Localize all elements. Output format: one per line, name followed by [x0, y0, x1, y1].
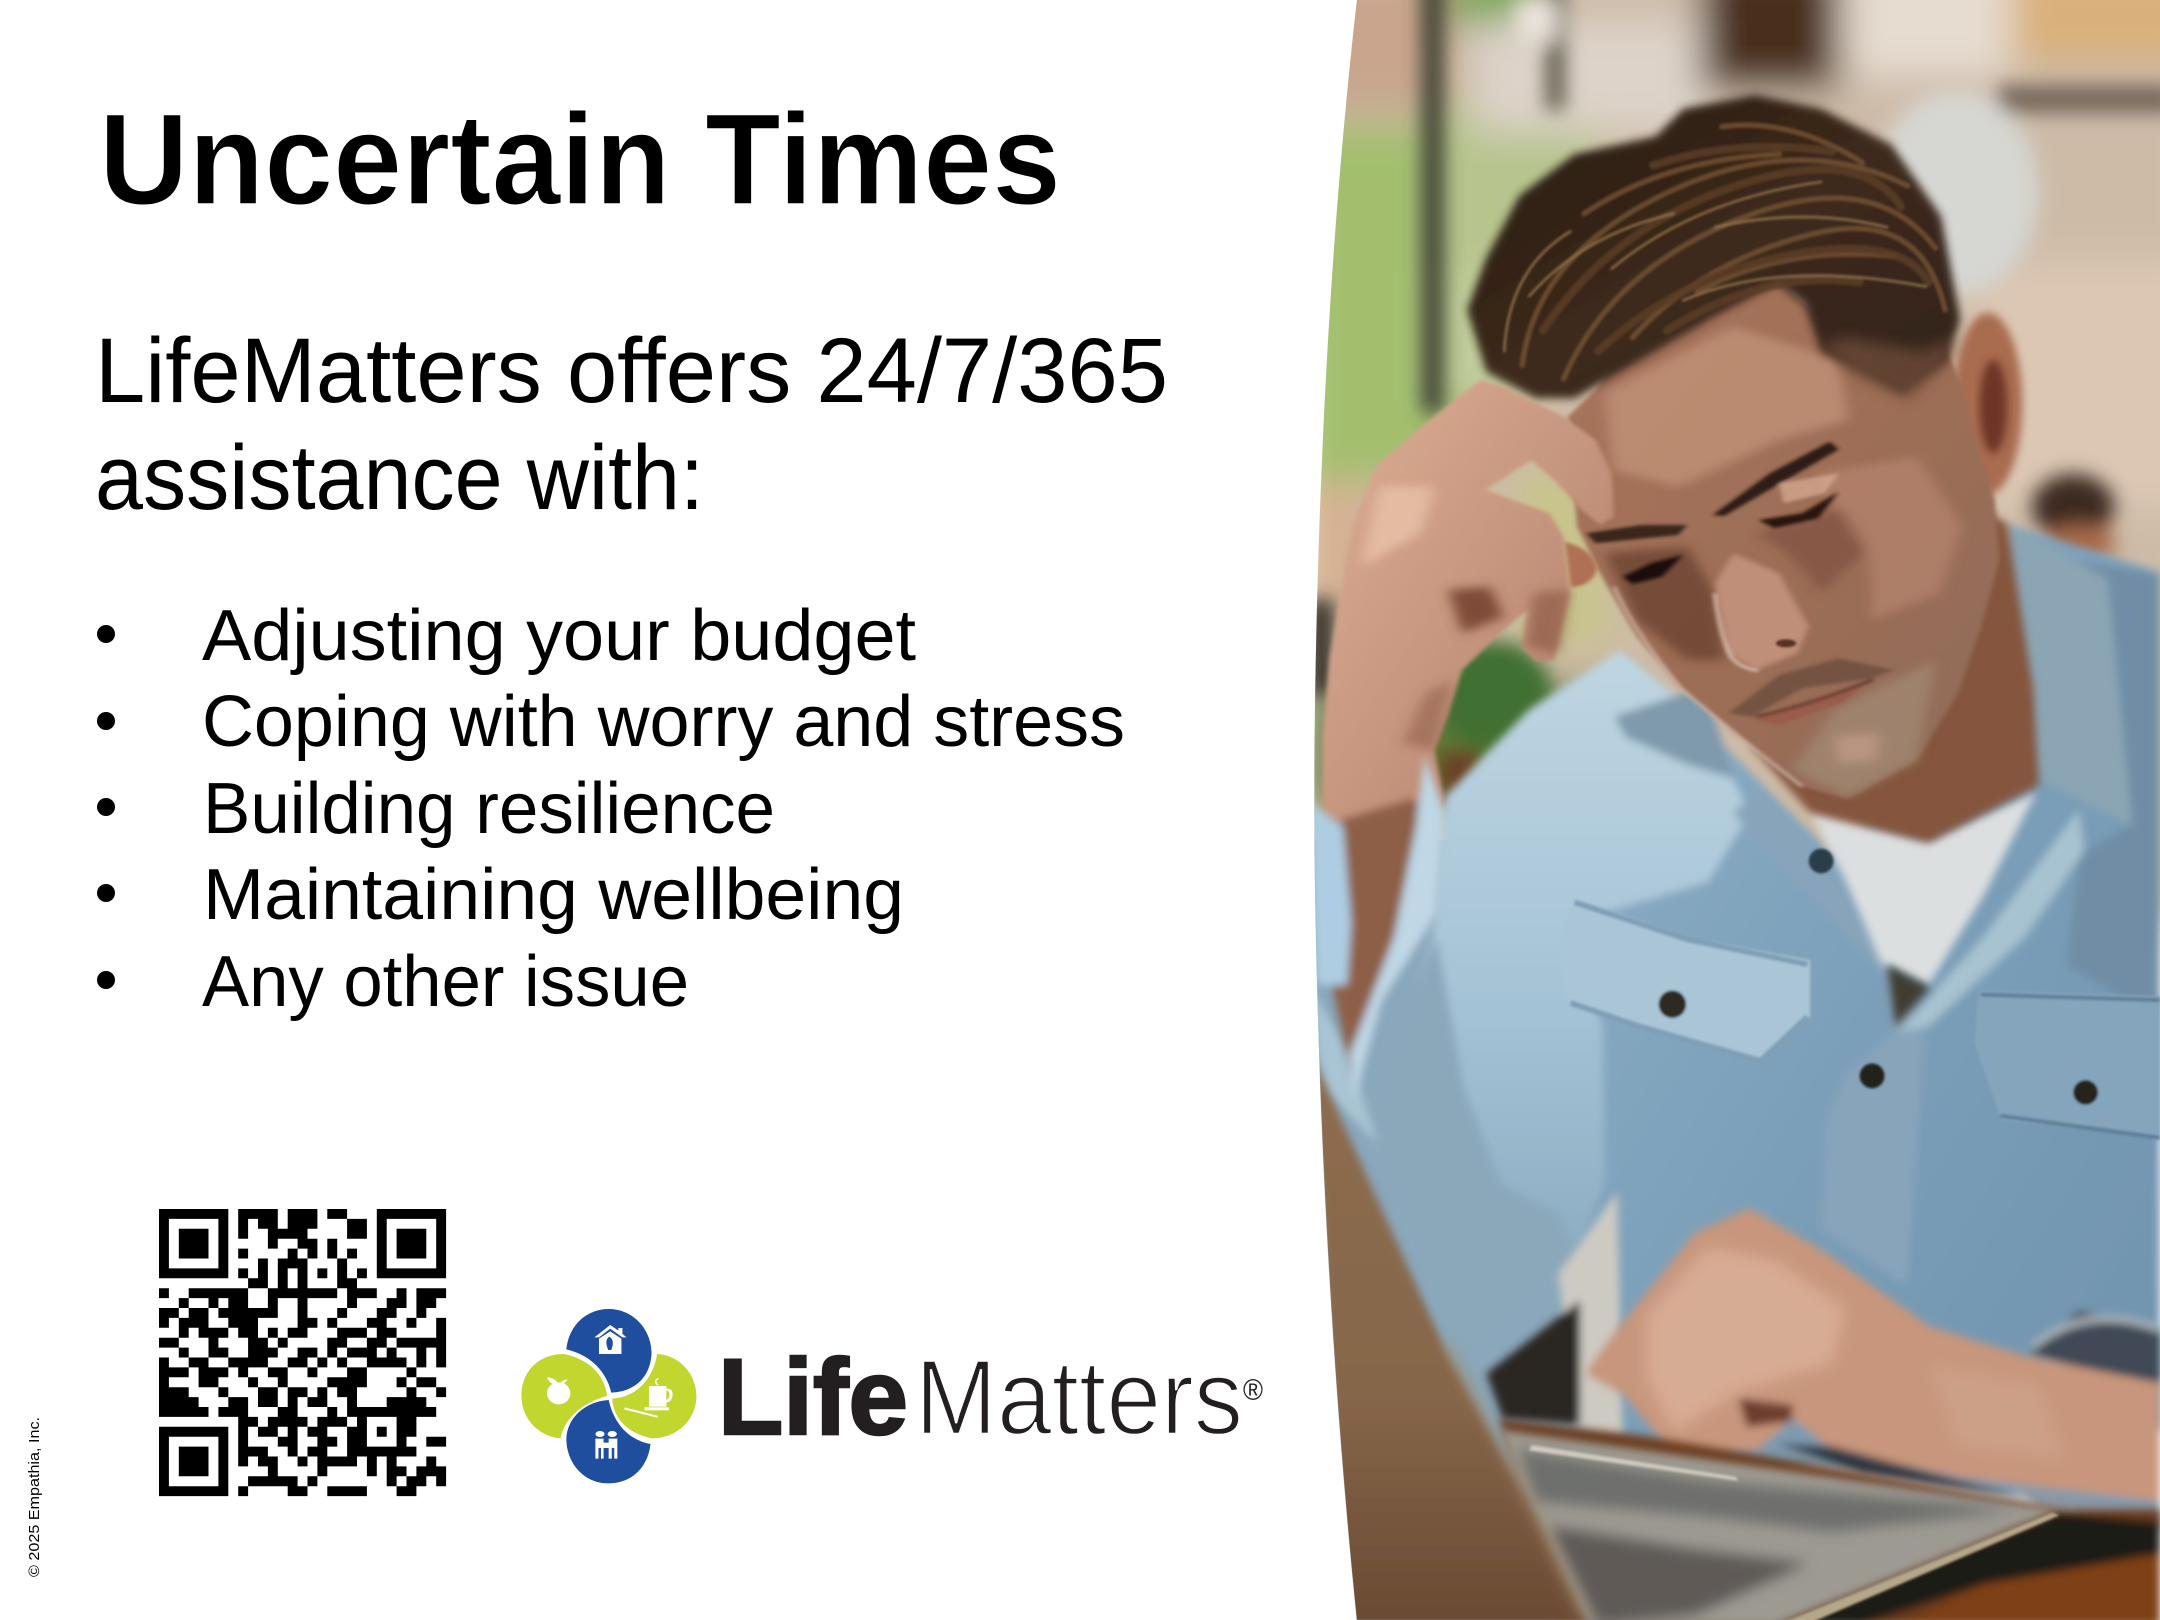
bullet list: Building resilience	[203, 769, 775, 849]
hair	[1467, 95, 1960, 399]
face shape	[1568, 267, 1999, 798]
photo: worried man at laptop	[1295, 0, 2160, 1620]
brows, eyes, mouth	[1586, 442, 1894, 725]
bullet list: Maintaining wellbeing	[203, 855, 904, 935]
QR code	[159, 1209, 446, 1496]
bullet list: Coping with worry and stress	[202, 682, 1125, 762]
shirt pockets and buttons	[1558, 849, 2160, 1138]
title: Uncertain Times	[99, 86, 1061, 232]
jaw highlight	[1614, 587, 1802, 787]
logo wordmark: Life	[718, 1336, 908, 1457]
hand shading	[1361, 487, 1570, 750]
shirt body	[1309, 523, 2160, 1474]
intro text	[95, 320, 1168, 529]
raised hand drawn in head-crop coordinates	[1322, 380, 1614, 840]
blurred cafe background	[1295, 0, 2160, 923]
background behind arm	[1486, 1192, 1623, 1440]
forearm and cuff	[1309, 755, 1445, 1099]
table	[1499, 1419, 2160, 1620]
face shading	[1605, 327, 1963, 797]
logo wordmark	[718, 1336, 1263, 1457]
left sleeve	[1428, 648, 1746, 1242]
collar flap	[1898, 810, 2084, 1032]
LifeMatters logo	[521, 1309, 1263, 1483]
ear	[1953, 313, 2022, 495]
intro text: assistance with:	[95, 427, 704, 529]
bullet list	[97, 596, 1125, 1022]
white t-shirt	[1810, 792, 2036, 985]
placket	[1733, 785, 1924, 1285]
neck	[1749, 510, 2039, 843]
bullet list: Adjusting your budget	[202, 596, 916, 676]
lower hand	[1586, 1208, 2160, 1529]
nose	[1715, 553, 1809, 670]
logo mark: four petals	[521, 1309, 696, 1483]
copyright: © 2025 Empathia, Inc.	[26, 1417, 43, 1577]
small finger behind brow	[1564, 542, 1597, 587]
right shoulder	[2067, 562, 2160, 996]
lower backdrop behind sleeve and arm	[1314, 840, 1584, 1620]
laptop base	[1502, 1430, 2059, 1620]
laptop lid	[1311, 1054, 1588, 1620]
bullet list: Any other issue	[202, 942, 689, 1022]
hand shape	[1322, 380, 1614, 840]
face drawn in head-crop coordinates	[1568, 267, 1999, 798]
logo wordmark: ®	[1243, 1374, 1263, 1407]
logo wordmark: Matters	[915, 1337, 1243, 1457]
intro text: LifeMatters offers 24/7/365	[95, 320, 1168, 422]
